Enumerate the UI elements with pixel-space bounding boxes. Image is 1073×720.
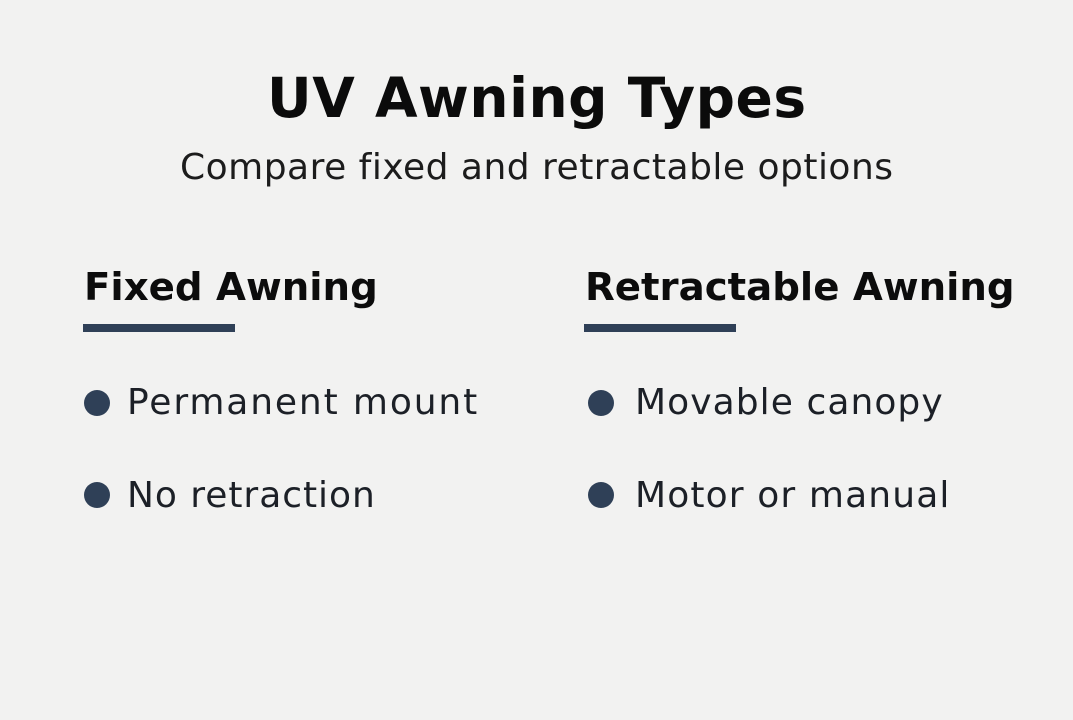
list item: Movable canopy: [635, 382, 944, 423]
heading: fixed awning: Fixed Awning: [84, 265, 378, 310]
bullet icon: [84, 482, 110, 508]
heading underline: [83, 324, 235, 332]
heading: retractable awning: Retractable Awning: [585, 265, 1015, 310]
panel: fixed awning: [83, 265, 479, 516]
list item: Permanent mount: [127, 382, 479, 423]
title: UV Awning Types: [267, 66, 807, 130]
bullet icon: [588, 390, 614, 416]
subtitle: Compare fixed and retractable options: [180, 147, 894, 188]
bullet icon: [84, 390, 110, 416]
panel: retractable awning: [584, 265, 1015, 516]
bullet icon: [588, 482, 614, 508]
list item: No retraction: [127, 475, 376, 516]
heading underline: [584, 324, 736, 332]
list item: Motor or manual: [635, 475, 951, 516]
